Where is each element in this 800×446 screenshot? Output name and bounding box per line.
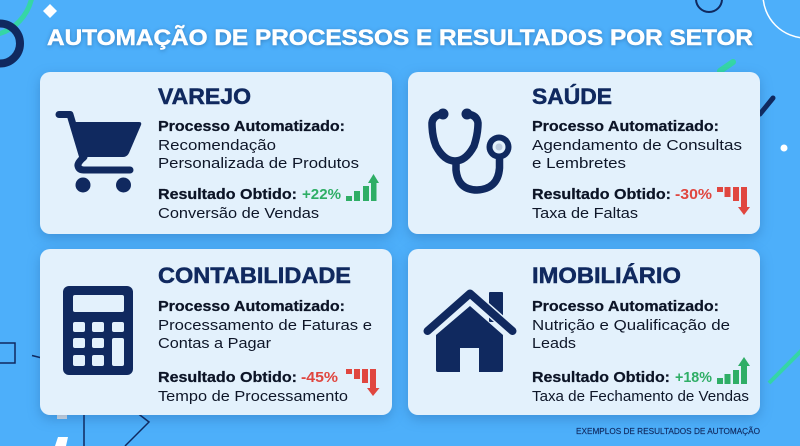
icon: red chart with down arrow (346, 369, 380, 396)
process description (532, 138, 742, 172)
icon: calculator (63, 286, 133, 375)
process description: e Lembretes (532, 156, 626, 172)
result metric: Taxa de Fechamento de Vendas (532, 389, 749, 405)
result label: Resultado Obtido: (158, 186, 297, 203)
process description: Contas a Pagar (158, 336, 271, 352)
result metric: Taxa de Faltas (532, 206, 638, 222)
heading: varejo: VAREJO (158, 84, 251, 109)
process label: Processo Automatizado: (532, 118, 719, 135)
heading: imobiliario: IMOBILIÁRIO (532, 263, 681, 288)
icon: green chart with up arrow (346, 174, 379, 201)
result label: Resultado Obtido: (532, 369, 670, 386)
panel: saude (408, 72, 760, 234)
footer note: EXEMPLOS DE RESULTADOS DE AUTOMAÇÃO (576, 426, 760, 436)
panel: imobiliario (408, 249, 760, 415)
process description: Leads (532, 336, 576, 352)
result label: Resultado Obtido: (532, 186, 671, 203)
icon: house (428, 292, 512, 372)
process description: Personalizada de Produtos (158, 156, 359, 172)
process description (158, 318, 372, 352)
panel: varejo (40, 72, 392, 234)
icon: red chart with down arrow (717, 187, 750, 215)
process label: Processo Automatizado: (158, 298, 345, 315)
icon: shopping cart (59, 114, 141, 192)
process description: Agendamento de Consultas (532, 138, 742, 154)
panel: contabilidade (40, 249, 392, 415)
process label: Processo Automatizado: (158, 118, 345, 135)
result metric: Conversão de Vendas (158, 206, 319, 222)
heading: saude: SAÚDE (532, 84, 612, 109)
process description (158, 138, 359, 172)
process label: Processo Automatizado: (532, 298, 719, 315)
title: AUTOMAÇÃO DE PROCESSOS E RESULTADOS POR SETOR (47, 25, 753, 50)
process description: Processamento de Faturas e (158, 318, 372, 334)
result metric: Tempo de Processamento (158, 389, 348, 405)
process description: Nutrição e Qualificação de (532, 318, 730, 334)
result value: -45% (301, 369, 338, 386)
result label: Resultado Obtido: (158, 369, 297, 386)
heading: contabilidade: CONTABILIDADE (158, 263, 351, 288)
process description (532, 318, 730, 352)
result value: +22% (302, 186, 341, 203)
result value: +18% (675, 369, 712, 386)
result value: -30% (675, 186, 712, 203)
process description: Recomendação (158, 138, 276, 154)
icon: stethoscope (432, 108, 512, 190)
icon: green chart with up arrow (717, 357, 750, 384)
